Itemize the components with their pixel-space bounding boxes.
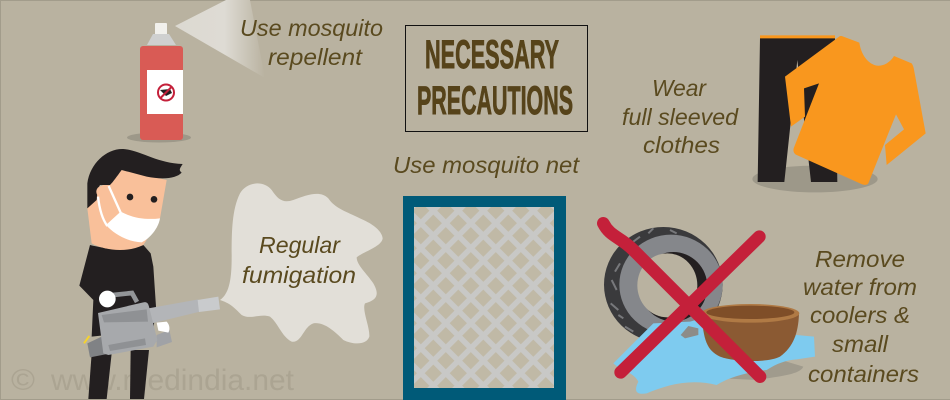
watermark: www.medindia.net <box>50 364 295 397</box>
icon: tire, bowl and spilled water crossed out <box>603 223 815 394</box>
title box: NECESSARY <box>425 33 559 77</box>
icon: clothes <box>752 35 926 192</box>
text: remove water from coolers and small containers: water from <box>803 274 917 300</box>
figure: man with fogging machine <box>79 149 220 399</box>
text: use mosquito repellent: repellent <box>268 44 364 70</box>
text: use mosquito repellent <box>240 15 383 70</box>
text: wear full sleeved clothes: full sleeved <box>622 104 739 130</box>
icon: repellent spray can <box>127 0 265 142</box>
icon: mosquito net <box>403 196 566 400</box>
text: remove water from coolers and small containers: small <box>832 331 889 357</box>
text: wear full sleeved clothes: Wear <box>652 75 707 101</box>
text: regular fumigation: fumigation <box>242 262 356 288</box>
text: wear full sleeved clothes <box>622 75 739 158</box>
watermark: © <box>11 364 35 397</box>
title box <box>406 26 588 132</box>
text: remove water from coolers and small containers <box>803 246 920 387</box>
text: wear full sleeved clothes: clothes <box>643 132 721 158</box>
text: regular fumigation: Regular <box>259 232 341 258</box>
title box: PRECAUTIONS <box>417 79 573 123</box>
icon: fumigation smoke cloud <box>220 183 383 343</box>
text: use mosquito repellent: Use mosquito <box>240 15 383 41</box>
text: use mosquito net: Use mosquito net <box>393 152 581 178</box>
text: remove water from coolers and small containers: coolers & <box>810 302 910 328</box>
text: remove water from coolers and small containers: containers <box>808 361 920 387</box>
text: regular fumigation <box>242 232 356 288</box>
text: remove water from coolers and small containers: Remove <box>815 246 905 272</box>
